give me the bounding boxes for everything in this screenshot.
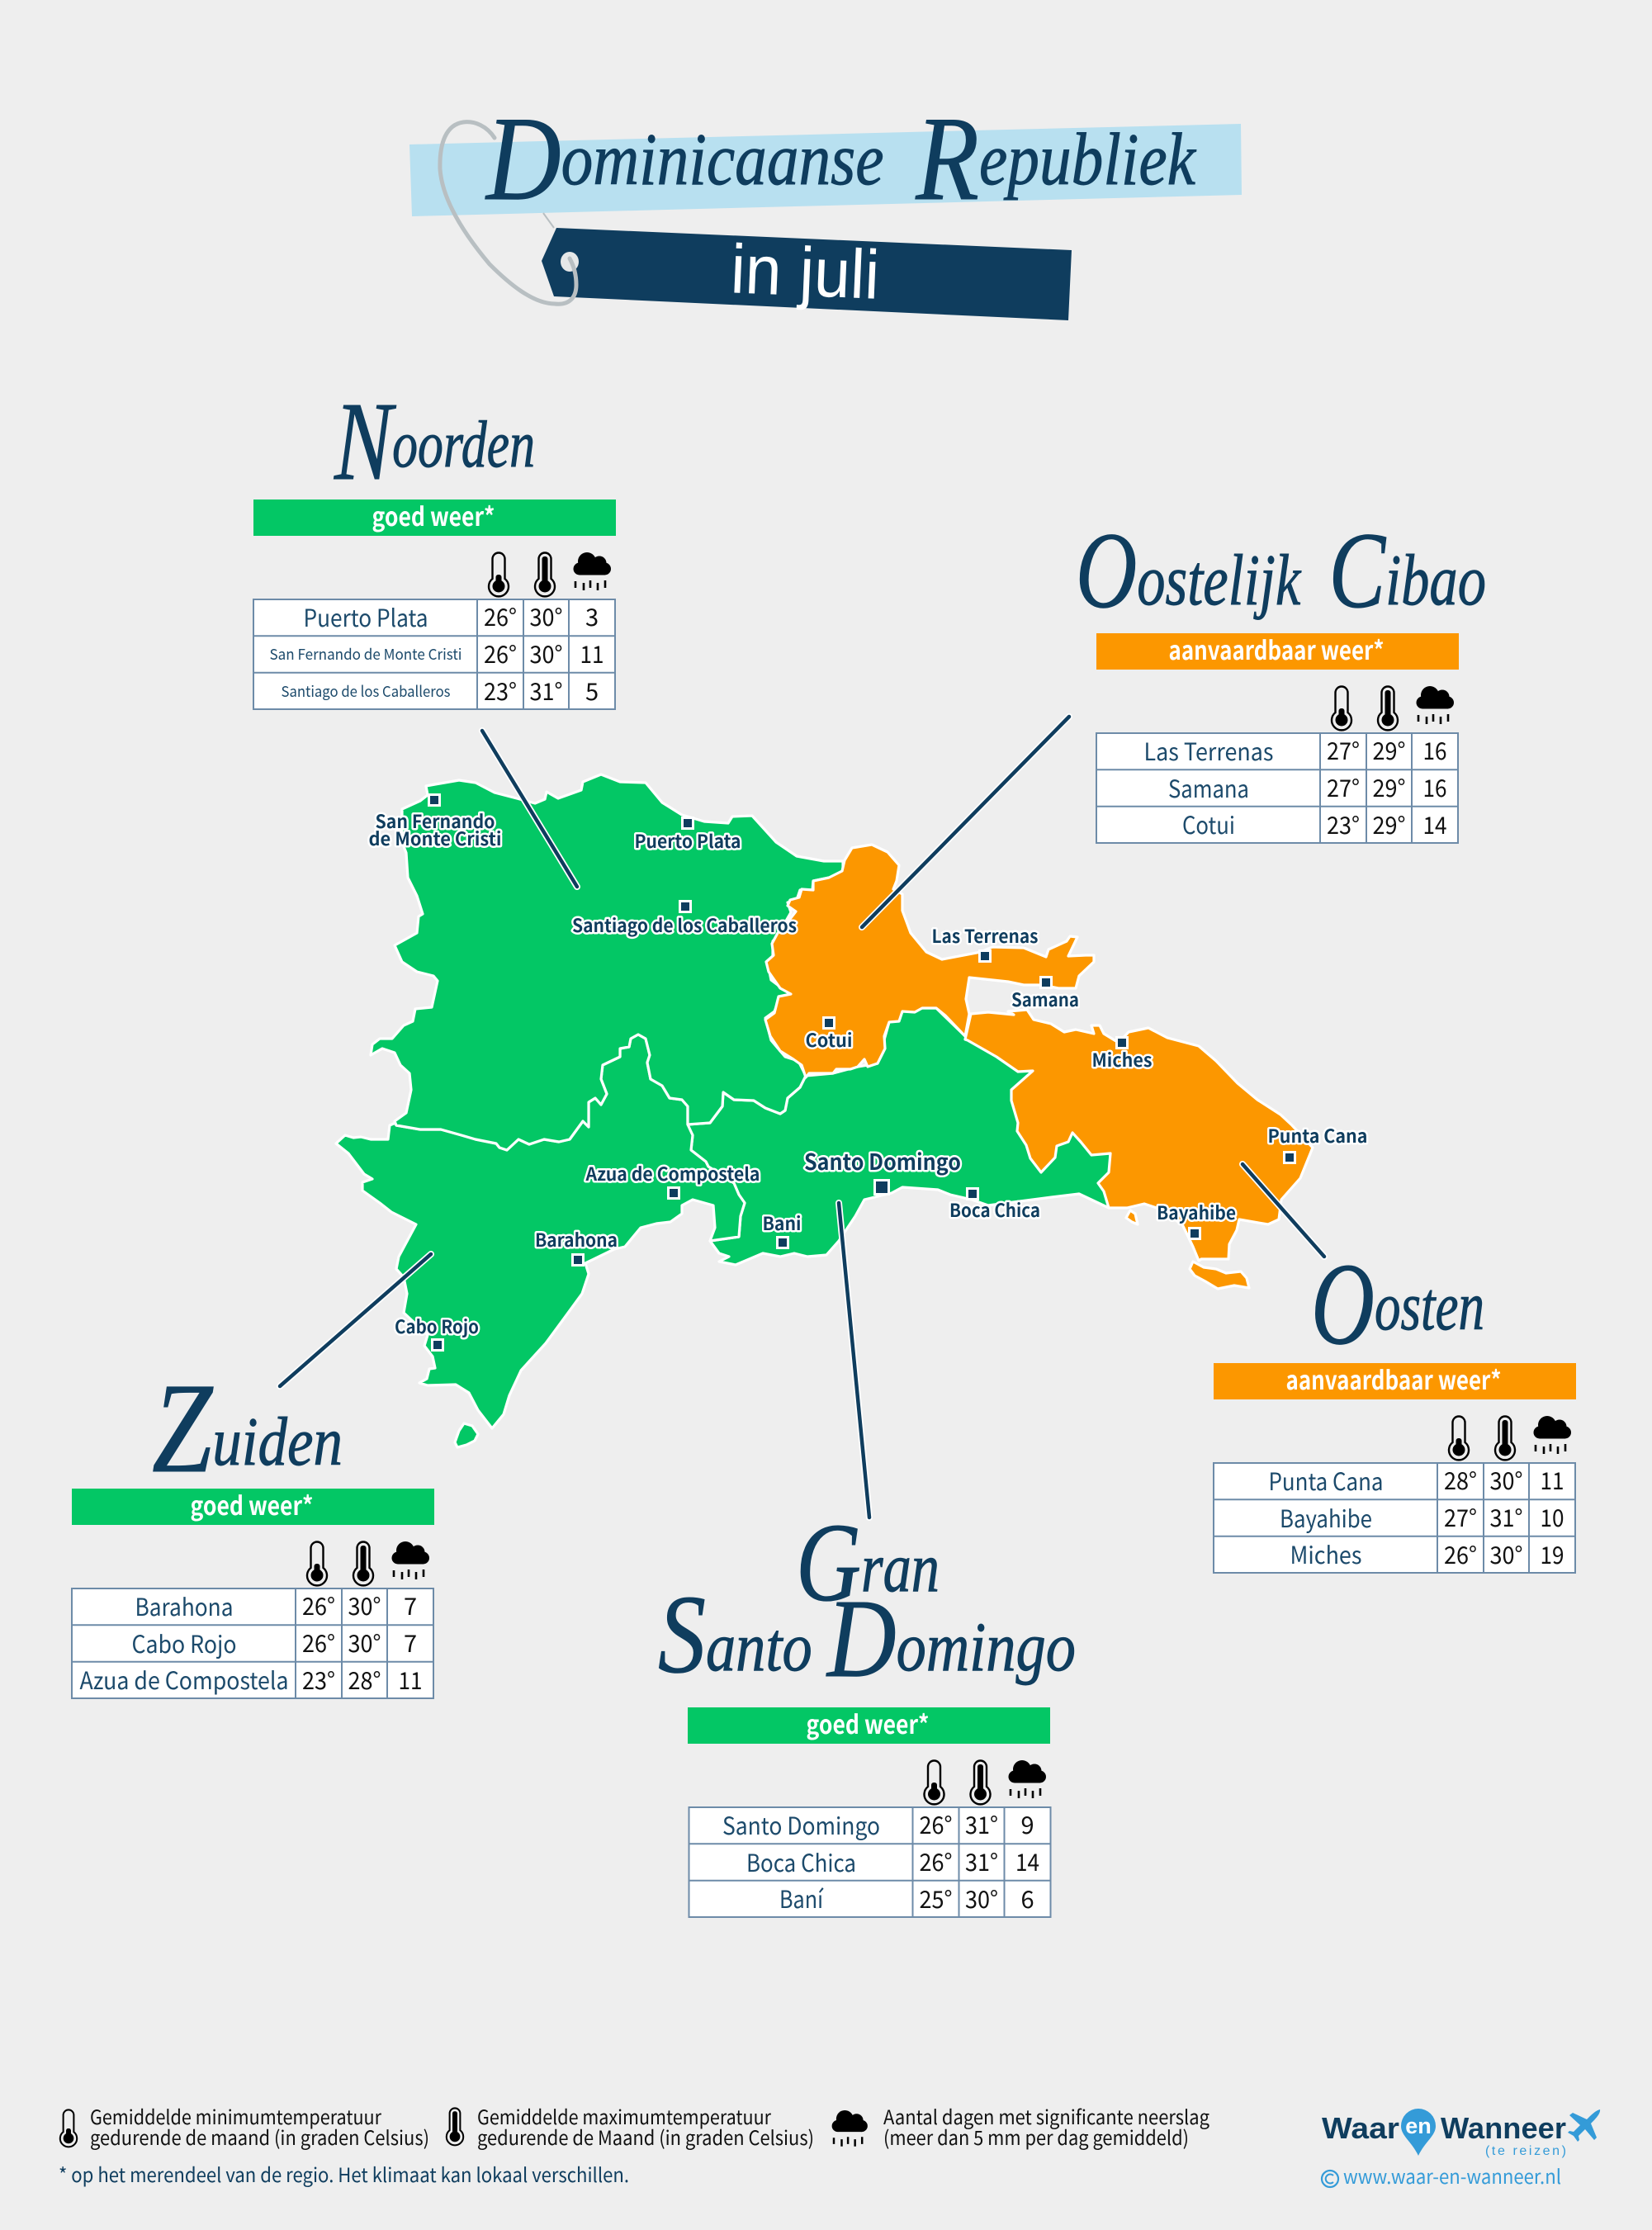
weather bar [1214,1363,1576,1399]
panel: Zuiden [72,1485,434,1698]
table: 31° [530,673,563,708]
legend: minimum temperature [60,2101,429,2151]
table: 30° [530,599,563,633]
table [253,599,615,709]
title banner [409,92,1242,320]
city: Azua de Compostela: Azua de Compostela [585,1160,760,1186]
heading: Gran Santo Domingo: S [658,1573,706,1697]
region: Gran Santo Domingo [687,1008,1110,1265]
title text: D [485,92,561,225]
leader line: Noorden [482,731,577,887]
table: 30° [348,1625,381,1659]
table: 25° [920,1881,953,1915]
table: 14 [1015,1844,1039,1878]
heading: Noorden: N [334,380,397,504]
icon: max temperature [535,553,555,596]
legend: maximum temperature: gedurende de Maand (in graden Celsius) [477,2122,814,2151]
island: small east [1126,1210,1138,1224]
table: 11 [398,1662,423,1697]
leader line: Zuiden [280,1254,431,1386]
city: Las Terrenas: Las Terrenas [931,922,1039,949]
table: 3 [585,599,599,633]
table: 14 [1423,807,1446,841]
city: Cotui: Cotui [806,1026,852,1053]
heading: Gran Santo Domingo [658,1501,1076,1701]
table: 30° [1489,1462,1522,1497]
city: Samana: Samana [1011,986,1079,1012]
city: Barahona [535,1226,618,1267]
table: 27° [1327,732,1360,767]
icon: max temperature [1495,1417,1515,1460]
icon: max temperature [353,1542,373,1585]
table: 29° [1372,769,1405,804]
weather label: goed weer* [806,1704,930,1741]
island: Saona [1190,1262,1249,1289]
table: 30° [1489,1536,1522,1571]
logo tagline: (te reizen) [1485,2144,1566,2158]
icon: rain [573,552,611,590]
city: Santiago de los Caballeros: Santiago de los Caballeros [572,911,797,938]
heading: Oostelijk Cibao: O [1076,509,1137,631]
legend: maximum temperature [447,2101,814,2151]
weather bar [72,1489,434,1525]
city: Bayahibe: Bayahibe [1157,1199,1236,1225]
heading: Oostelijk Cibao: C [1329,509,1387,631]
table: 30° [965,1881,998,1915]
city: Santo Domingo: Santo Domingo [804,1144,961,1177]
heading: Gran Santo Domingo: anto [706,1608,827,1686]
table: 7 [404,1625,417,1659]
table: 26° [484,599,517,633]
table: 27° [1327,769,1360,804]
table: Baní [779,1881,824,1915]
table: Bayahibe [1280,1500,1372,1535]
table: 29° [1372,807,1405,841]
table: 9 [1020,1806,1034,1841]
city: Puerto Plata: Puerto Plata [634,827,741,854]
icon: rain [1009,1760,1046,1798]
city: Santiago de los Caballeros [572,900,797,938]
heading: Noorden: oorden [392,409,535,481]
city: Punta Cana: Punta Cana [1268,1122,1367,1148]
legend: minimum temperature: Gemiddelde minimumtemperatuur [90,2101,382,2130]
table: 31° [1489,1499,1522,1534]
icon: min temperature [1332,687,1351,730]
weather label: goed weer* [372,496,495,533]
weather label: goed weer* [190,1485,314,1522]
table: Azua de Compostela [79,1662,289,1697]
title text: R [915,92,979,225]
table: Cabo Rojo [132,1626,236,1660]
weather label: aanvaardbaar weer* [1169,630,1384,667]
icon: min temperature [307,1542,327,1585]
legend: maximum temperature: Gemiddelde maximumtemperatuur [477,2101,772,2130]
panel: Oostelijk Cibao [1096,630,1459,843]
legend: minimum temperature: gedurende de maand (in graden Celsius) [90,2122,429,2151]
legend: precipitation: Aantal dagen met significante neerslag [883,2101,1209,2130]
icon: min temperature [925,1760,944,1804]
table: 16 [1423,732,1446,767]
table: Puerto Plata [304,599,428,634]
logo text: Waar: Waar [1322,2111,1399,2145]
city: Azua de Compostela [585,1160,760,1200]
city: Cabo Rojo: Cabo Rojo [395,1313,479,1339]
city: Boca Chica: Boca Chica [949,1196,1040,1223]
table: Santiago de los Caballeros [281,680,451,702]
icon: rain [1417,686,1454,724]
table: San Fernando de Monte Cristi [269,643,462,665]
logo text: en: en [1405,2114,1432,2138]
panel: Noorden [253,496,616,709]
icon: airplane [1568,2109,1600,2142]
icon: min temperature [489,553,509,596]
table: 6 [1020,1881,1034,1915]
table: 26° [920,1806,953,1841]
heading: Zuiden: uiden [212,1404,343,1480]
table: 23° [1327,807,1360,841]
table: 11 [580,636,604,670]
table: 16 [1423,769,1446,804]
table: 23° [484,673,517,708]
heading: Oosten: O [1311,1238,1375,1369]
icon: map pin [1401,2109,1436,2156]
title band [409,124,1242,216]
city: Samana [1011,976,1079,1012]
table: Samana [1168,770,1249,805]
table: 5 [585,673,599,708]
weather bar [1096,633,1459,670]
heading: Zuiden: Z [152,1356,214,1499]
icon: max temperature [1378,687,1398,730]
table: 29° [1372,732,1405,767]
icon: min temperature [1449,1417,1469,1460]
title text: epubliek [979,119,1197,201]
icon: max temperature [971,1760,991,1804]
city: Punta Cana [1268,1122,1367,1164]
legend: precipitation [832,2101,1209,2151]
city: Puerto Plata [634,817,741,854]
heading: Oostelijk Cibao: ostelijk [1137,541,1329,621]
logo: Waar en Wanneer [1322,2109,1600,2190]
table: 26° [302,1625,335,1659]
city: Bayahibe [1157,1199,1236,1240]
table: 23° [302,1662,335,1697]
table: 19 [1541,1536,1564,1571]
heading: Gran Santo Domingo: D [826,1577,897,1701]
table: 26° [920,1844,953,1878]
table: 28° [1444,1462,1477,1497]
region: Noorden [371,774,843,1150]
table: 11 [1541,1462,1564,1497]
table: 30° [530,636,563,670]
luggage tag [542,228,1072,320]
heading: Oostelijk Cibao: ibao [1385,541,1486,621]
table: 26° [1444,1536,1477,1571]
footnote: * op het merendeel van de regio. Het klimaat kan lokaal verschillen. [59,2159,629,2188]
leader line: Oosten [1243,1164,1324,1257]
legend: precipitation: (meer dan 5 mm per dag gemiddeld) [883,2122,1189,2151]
icon: copyright [1322,2171,1338,2187]
table: Miches [1290,1536,1362,1571]
table: Boca Chica [746,1844,856,1879]
table: 26° [484,636,517,670]
leader line: Gran Santo Domingo [839,1203,869,1517]
city: Santo Domingo [804,1144,961,1195]
table: 30° [348,1588,381,1622]
city: Bani [763,1210,801,1249]
title text: ominicaanse [561,119,916,201]
table [72,1588,433,1698]
icon: rain [391,1541,429,1579]
leader line: Oostelijk Cibao [862,717,1069,927]
table: Punta Cana [1268,1463,1384,1498]
panel: Oosten [1214,1360,1576,1573]
table: 31° [965,1844,998,1878]
heading: Gran Santo Domingo: ran [861,1529,940,1607]
region: Oostelijk Cibao [765,845,1094,1077]
island: Beata [455,1423,478,1447]
city: Cabo Rojo [395,1313,479,1352]
weather bar [253,500,616,536]
table [1096,732,1458,843]
city: San Fernando de Monte Cristi [368,793,502,851]
table [689,1806,1050,1917]
table: Las Terrenas [1144,733,1273,768]
city: Las Terrenas [931,922,1039,963]
subtitle: in juli [729,230,881,314]
panel: Gran Santo Domingo [688,1704,1050,1917]
logo text: Wanneer: Wanneer [1441,2111,1566,2145]
table: 10 [1541,1499,1564,1534]
table: 27° [1444,1499,1477,1534]
table: Barahona [135,1588,233,1623]
table [1214,1462,1575,1573]
table: Cotui [1182,807,1235,841]
icon: rain [1534,1416,1571,1454]
map of the Dominican Republic [336,774,1313,1447]
table: Santo Domingo [722,1807,880,1842]
city: San Fernando de Monte Cristi: de Monte Cristi [368,825,502,851]
city: Miches: Miches [1091,1046,1153,1072]
heading: Gran Santo Domingo: G [796,1501,861,1625]
heading: Gran Santo Domingo: omingo [897,1608,1076,1686]
table: 31° [965,1806,998,1841]
tag hole [561,252,579,272]
string end [543,213,554,228]
website: www.waar-en-wanneer.nl [1343,2161,1561,2190]
weather bar [688,1707,1050,1744]
weather label: aanvaardbaar weer* [1286,1360,1501,1397]
city: San Fernando de Monte Cristi: San Fernando [375,807,495,834]
table: 7 [404,1588,417,1622]
table: 26° [302,1588,335,1622]
table: 28° [348,1662,381,1697]
city: Barahona: Barahona [535,1226,618,1252]
city: Bani: Bani [763,1210,801,1236]
heading: Oosten: osten [1375,1268,1484,1345]
tag string [440,122,576,304]
region: Zuiden [336,1035,745,1428]
region: Oosten [965,1010,1313,1261]
